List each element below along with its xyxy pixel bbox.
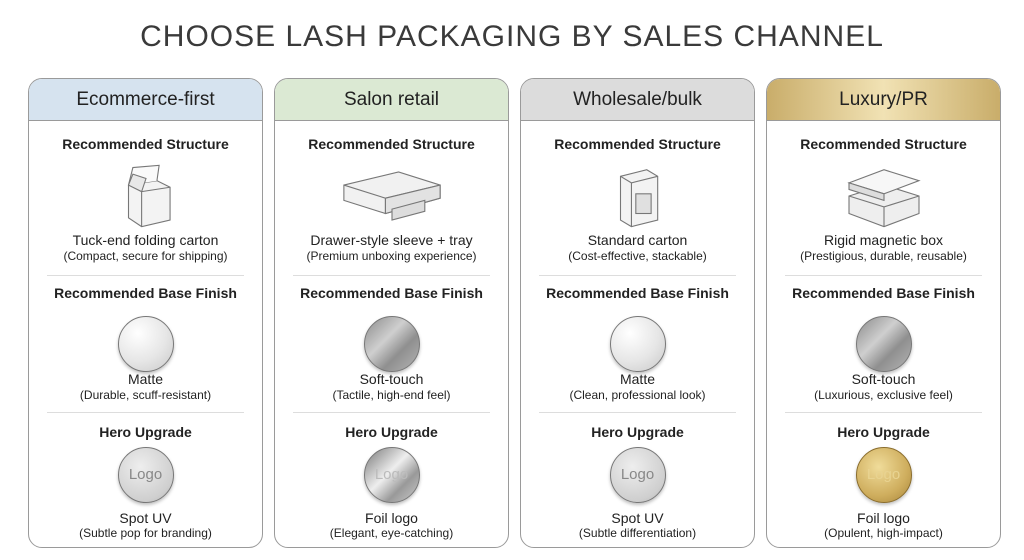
header: luxury: [767, 79, 1000, 121]
structure label: Recommended Structure: [62, 136, 229, 152]
icon: drawer box: [343, 171, 441, 221]
finish note: (Clean, professional look): [569, 388, 706, 402]
upgrade note: (Subtle differentiation): [579, 526, 696, 540]
upgrade label: Hero Upgrade: [99, 424, 192, 440]
icon: soft-touch swatch: [364, 316, 420, 372]
header: wholesale: [521, 79, 754, 121]
upgrade label: Hero Upgrade: [591, 424, 684, 440]
structure note: (Prestigious, durable, reusable): [800, 249, 967, 263]
icon: spot uv logo: [610, 447, 666, 503]
header: wholesale: Wholesale/bulk: [573, 89, 702, 110]
icon: spot uv logo: Logo: [621, 466, 654, 483]
panel: salon: [274, 78, 509, 548]
finish label: Recommended Base Finish: [54, 285, 237, 301]
icon: tuck-end carton: [128, 164, 171, 228]
structure note: (Premium unboxing experience): [306, 249, 477, 263]
finish note: (Luxurious, exclusive feel): [814, 388, 953, 402]
icon: spot uv logo: Logo: [129, 466, 162, 483]
upgrade name: Spot UV: [119, 510, 172, 526]
icon: spot uv logo: [118, 447, 174, 503]
header: salon: Salon retail: [344, 89, 439, 110]
structure note: (Cost-effective, stackable): [568, 249, 707, 263]
icon: soft-touch swatch: [856, 316, 912, 372]
upgrade note: (Subtle pop for branding): [79, 526, 212, 540]
icon: rigid magnetic box: [848, 169, 920, 228]
finish note: (Durable, scuff-resistant): [80, 388, 211, 402]
structure name: Rigid magnetic box: [824, 232, 943, 248]
header: salon: [275, 79, 508, 121]
icon: foil logo silver: [364, 447, 420, 503]
icon: foil logo silver: Logo: [375, 466, 408, 483]
panel: wholesale: [520, 78, 755, 548]
structure name: Tuck-end folding carton: [73, 232, 218, 248]
finish label: Recommended Base Finish: [300, 285, 483, 301]
structure name: Drawer-style sleeve + tray: [310, 232, 473, 248]
icon: matte swatch: [118, 316, 174, 372]
structure note: (Compact, secure for shipping): [63, 249, 228, 263]
finish name: Matte: [128, 371, 163, 387]
finish name: Matte: [620, 371, 655, 387]
upgrade label: Hero Upgrade: [837, 424, 930, 440]
upgrade note: (Opulent, high-impact): [824, 526, 943, 540]
header: ecommerce: [29, 79, 262, 121]
structure label: Recommended Structure: [554, 136, 721, 152]
header: ecommerce: Ecommerce-first: [76, 89, 215, 110]
structure label: Recommended Structure: [308, 136, 475, 152]
finish note: (Tactile, high-end feel): [332, 388, 451, 402]
finish label: Recommended Base Finish: [546, 285, 729, 301]
panel: luxury: [766, 78, 1001, 548]
icon: gold foil logo: Logo: [867, 466, 900, 483]
finish label: Recommended Base Finish: [792, 285, 975, 301]
upgrade label: Hero Upgrade: [345, 424, 438, 440]
header: luxury: Luxury/PR: [839, 89, 928, 110]
structure name: Standard carton: [588, 232, 687, 248]
icon: standard carton: [620, 169, 658, 228]
upgrade name: Foil logo: [857, 510, 910, 526]
icon: gold foil logo: [856, 447, 912, 503]
structure label: Recommended Structure: [800, 136, 967, 152]
upgrade name: Spot UV: [611, 510, 664, 526]
title: CHOOSE LASH PACKAGING BY SALES CHANNEL: [140, 20, 884, 53]
panel: ecommerce: [28, 78, 263, 548]
upgrade note: (Elegant, eye-catching): [330, 526, 453, 540]
finish name: Soft-touch: [360, 371, 423, 387]
icon: matte swatch: [610, 316, 666, 372]
finish name: Soft-touch: [852, 371, 915, 387]
upgrade name: Foil logo: [365, 510, 418, 526]
